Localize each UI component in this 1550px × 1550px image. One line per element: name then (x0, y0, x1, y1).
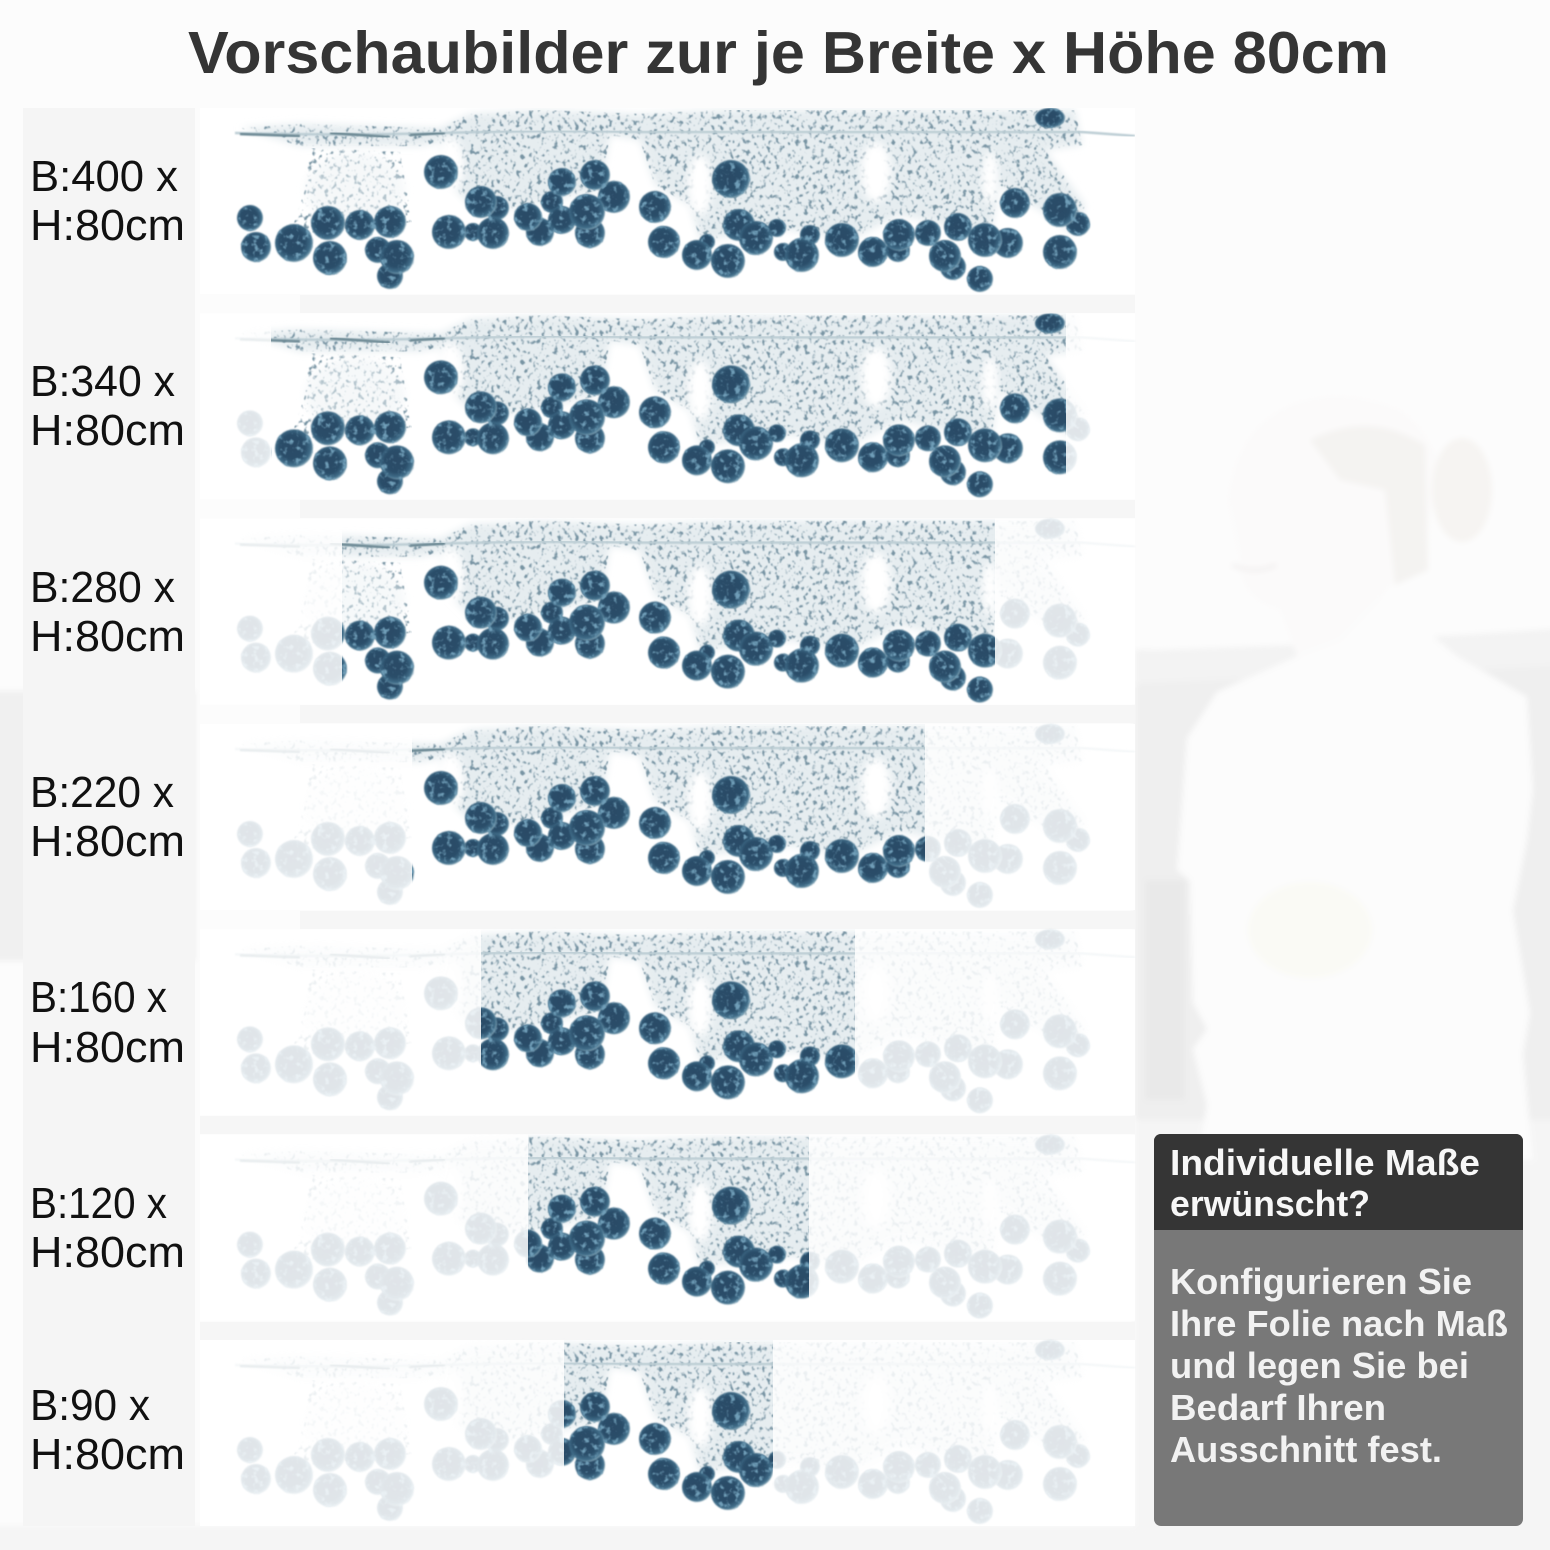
callout body: Ausschnitt fest. (1170, 1429, 1442, 1470)
preview: 90 x 80 (200, 1340, 1135, 1526)
preview: 280 x 80 (200, 519, 1135, 705)
label: 90 x 80: H:80cm (30, 1430, 185, 1479)
preview: 160 x 80 (200, 929, 1135, 1115)
preview: 220 x 80 (200, 724, 1135, 910)
preview: 120 x 80 (200, 1135, 1135, 1321)
label: 120 x 80: H:80cm (30, 1228, 185, 1277)
label: 160 x 80: H:80cm (30, 1023, 185, 1072)
label: 90 x 80: B:90 x (30, 1381, 150, 1430)
row gaps (200, 295, 1135, 1340)
label: 280 x 80: H:80cm (30, 612, 185, 661)
callout: custom sizes (1154, 1134, 1523, 1526)
label: 340 x 80: B:340 x (30, 357, 175, 406)
title: Vorschaubilder zur je Breite x Höhe 80cm (188, 20, 1389, 86)
label: 120 x 80: B:120 x (30, 1179, 167, 1228)
preview: 340 x 80 (200, 313, 1135, 499)
label: 340 x 80: H:80cm (30, 406, 185, 455)
preview: 400 x 80 (200, 108, 1135, 294)
label: 160 x 80: B:160 x (30, 973, 167, 1022)
label: 280 x 80: B:280 x (30, 563, 175, 612)
label: 220 x 80: B:220 x (30, 768, 174, 817)
woman silhouette (1177, 396, 1533, 1160)
callout body: und legen Sie bei (1170, 1345, 1469, 1386)
callout body: Bedarf Ihren (1170, 1387, 1386, 1428)
panel: size label column (23, 108, 195, 1526)
label: 400 x 80: H:80cm (30, 201, 185, 250)
label: 400 x 80: B:400 x (30, 152, 178, 201)
callout heading: erwünscht? (1170, 1183, 1370, 1224)
callout body: Konfigurieren Sie (1170, 1261, 1472, 1302)
label: 220 x 80: H:80cm (30, 817, 185, 866)
callout body: Ihre Folie nach Maß (1170, 1303, 1508, 1344)
callout heading: Individuelle Maße (1170, 1142, 1480, 1183)
